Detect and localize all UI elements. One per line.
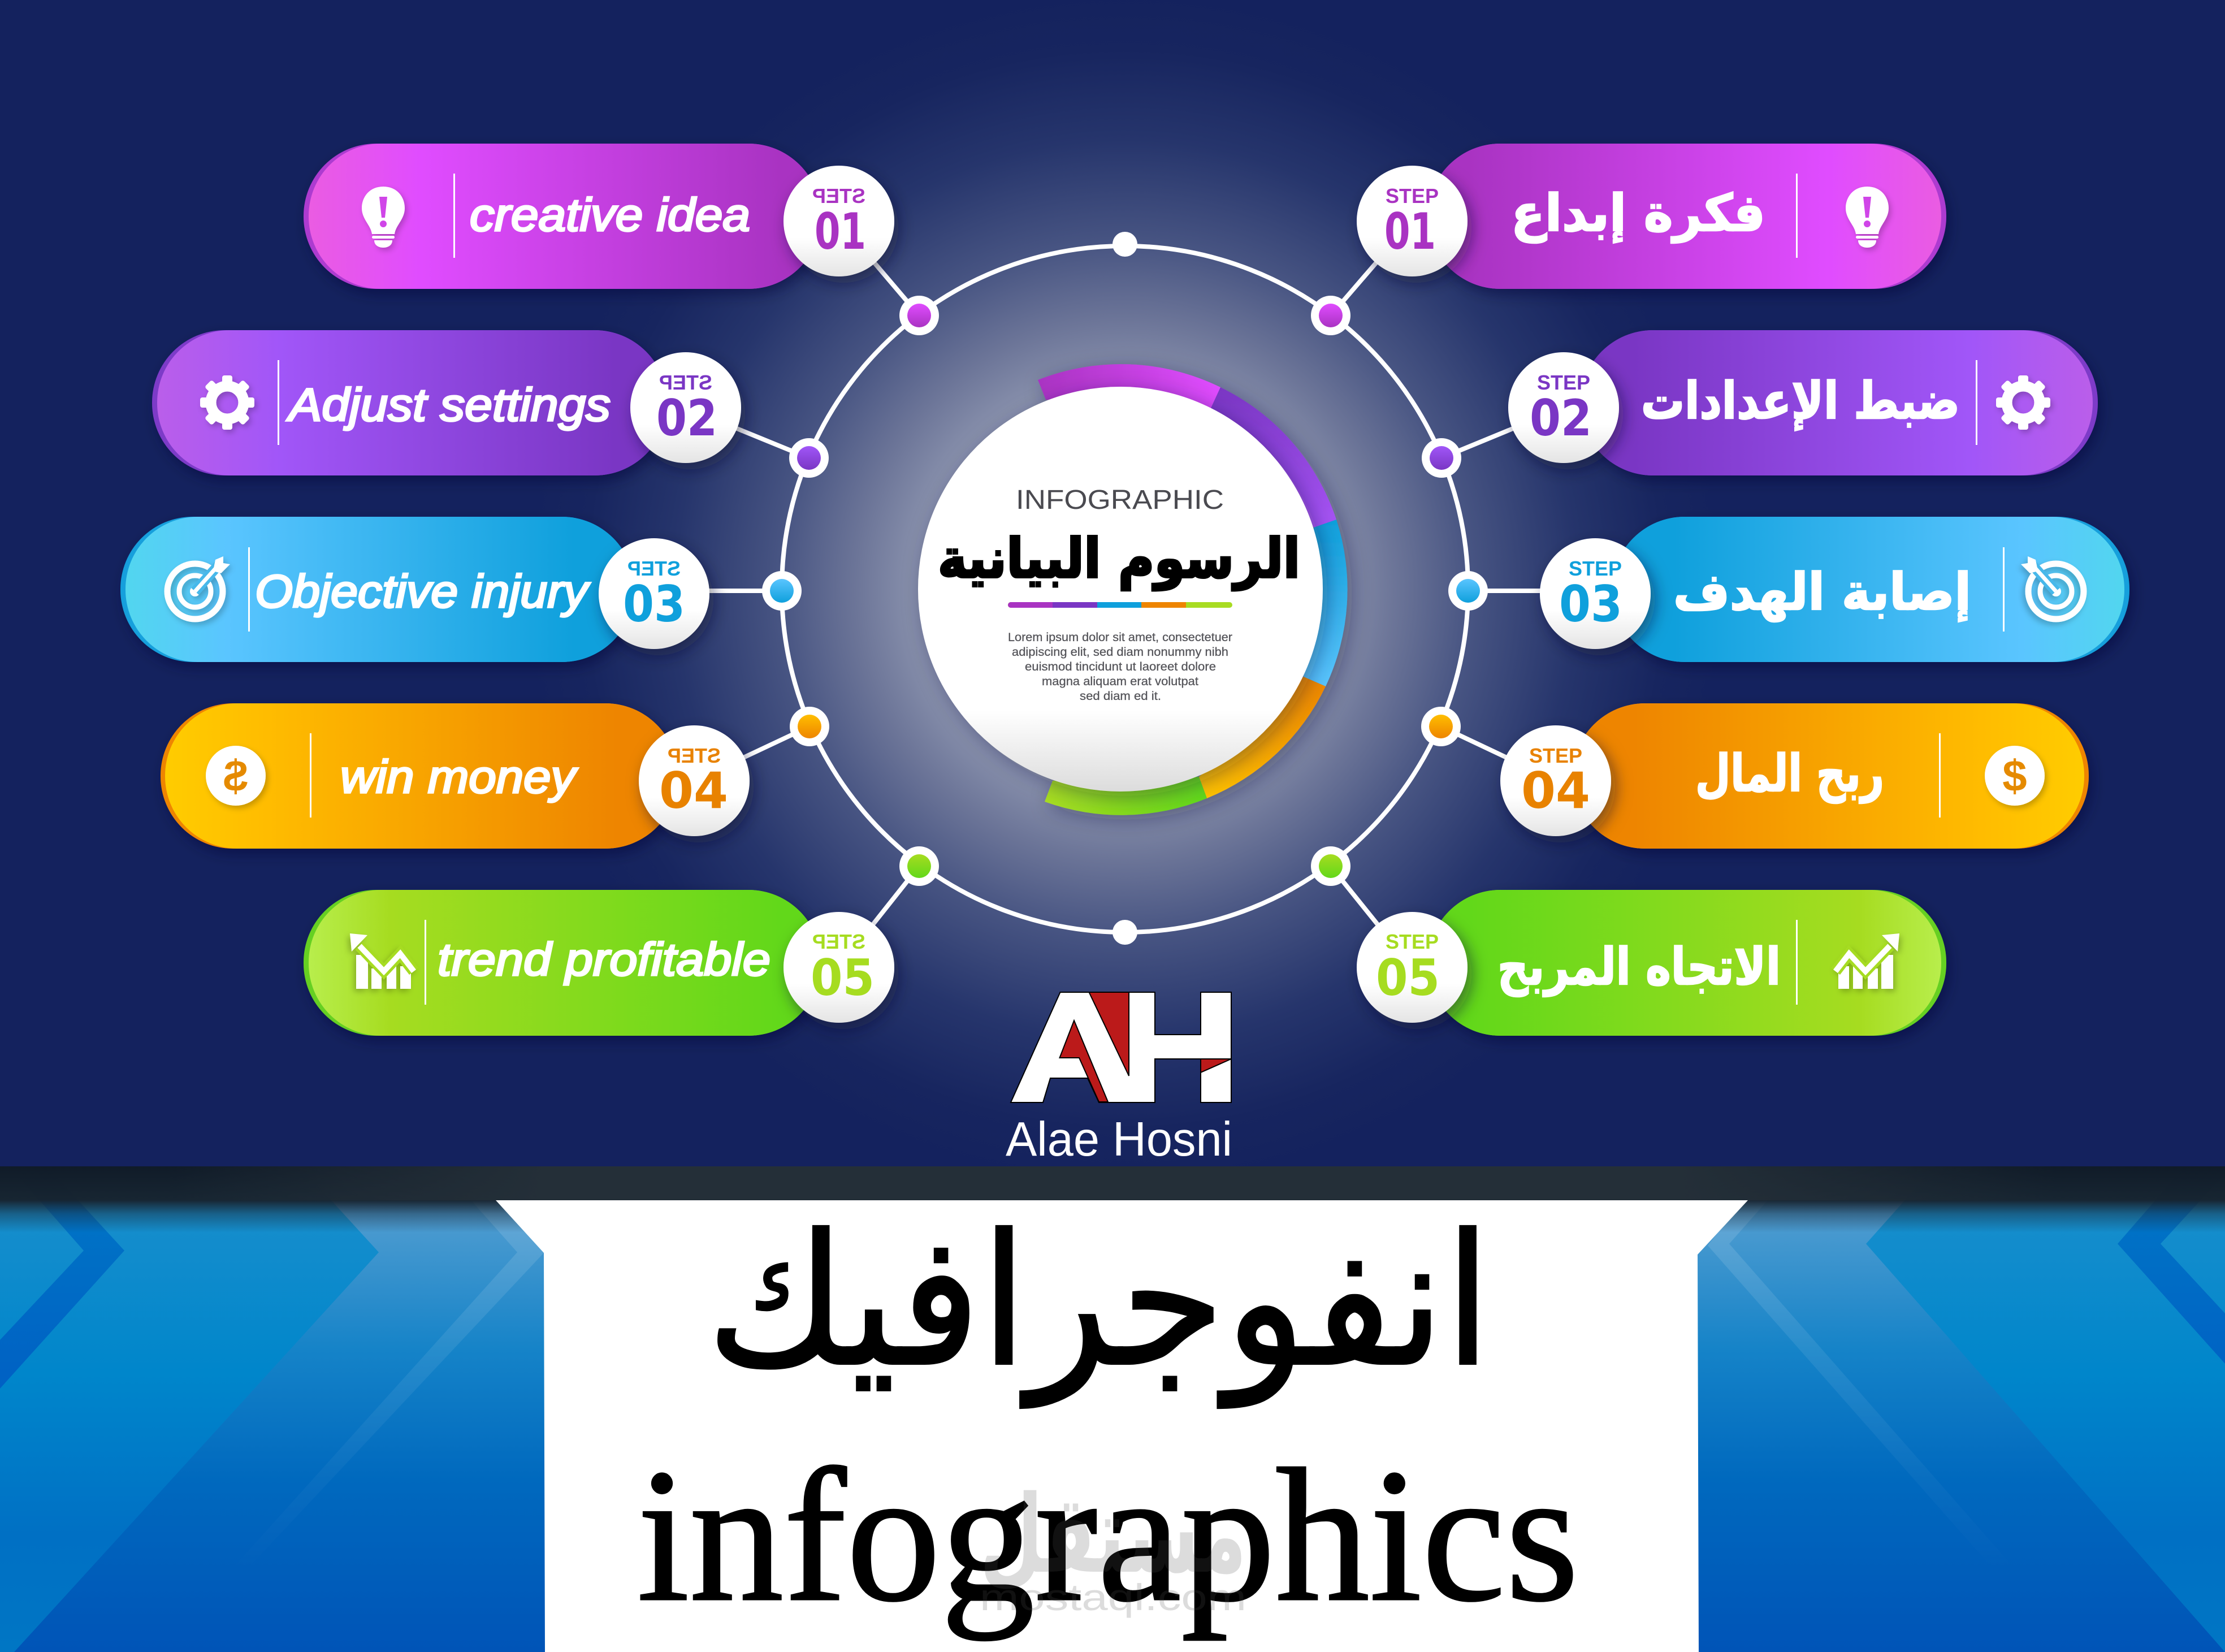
logo name: Alae Hosni (1006, 1113, 1232, 1166)
badge: right step 01: STEP (1386, 184, 1439, 207)
badge: right step 03: STEP (1569, 557, 1622, 580)
right pill 3: target (1612, 517, 2129, 662)
badge: right step 02: 02 (1530, 389, 1592, 447)
watermark: مستقل (980, 1472, 1246, 1597)
right pill 4: money (1573, 703, 2089, 849)
badge: right step 04 (1500, 725, 1611, 836)
icon: trend chart (350, 933, 414, 989)
badge: right step 05 (1357, 912, 1468, 1023)
center body text: adipiscing elit, sed diam nonummy nibh (1012, 646, 1228, 659)
badge: left step 01 (783, 166, 894, 276)
icon: target (167, 556, 230, 619)
center body text: magna aliquam erat volutpat (1042, 675, 1198, 688)
title: Arabic: انفوجرافيك (707, 1196, 1491, 1409)
badge: right step 03 (1540, 538, 1651, 649)
watermark: mostaql.com (980, 1576, 1246, 1618)
bottom blue panel: left side (0, 1166, 548, 1652)
left pill 5: trend profitable: trend profitable (438, 934, 770, 985)
badge: right step 04: STEP (1529, 744, 1582, 767)
icon: target (2021, 556, 2084, 619)
segmented colour ring (1038, 364, 1348, 815)
connector lines (654, 221, 1595, 967)
badge: left step 02: 02 (656, 389, 717, 447)
badge: left step 01: STEP (812, 184, 865, 207)
badge: right step 01 (1357, 166, 1468, 276)
badge: left step 01: 01 (815, 202, 866, 261)
icon: dollar coin (1985, 746, 2045, 806)
center body text: euismod tincidunt ut laoreet dolore (1025, 660, 1216, 673)
badge: left step 05 (783, 912, 894, 1023)
left pill 1: creative idea: creative idea (470, 189, 750, 241)
badge: right step 02: STEP (1537, 371, 1590, 394)
badge: right step 02 (1508, 352, 1619, 463)
badge: left step 02 (630, 352, 741, 463)
title: English: infographics (637, 1430, 1579, 1641)
right pill 1: idea: فكرة إبداع (1511, 184, 1765, 243)
icon: gear (1996, 375, 2050, 430)
left pill 2: Adjust settings: Adjust settings (286, 379, 611, 431)
badge: left step 03: STEP (627, 557, 681, 580)
badge: left step 05: STEP (812, 930, 865, 953)
left pill 1: creative idea (304, 144, 821, 289)
icon: trend chart (1836, 933, 1899, 989)
badge: left step 05: 05 (811, 949, 875, 1007)
left pill 2: Adjust settings (152, 330, 667, 475)
badge: left step 02: STEP (659, 371, 712, 394)
white title panel (496, 1200, 1748, 1652)
icon: gear (200, 375, 254, 430)
icon: dollar coin: $ (223, 751, 248, 801)
icon: dollar coin (206, 746, 266, 806)
badge: left step 04: STEP (668, 744, 721, 767)
right pill 4: money: ربح المال (1695, 744, 1884, 803)
right pill 2: settings: ضبط الإعدادات (1641, 371, 1960, 431)
dark band under the navy area (0, 1166, 2225, 1232)
badge: left step 04: 04 (659, 762, 728, 820)
left pill 4: win money: win money (340, 751, 578, 803)
left pill 4: win money (161, 703, 678, 849)
icon: light bulb (1846, 187, 1889, 248)
colour bar (1008, 602, 1232, 608)
badge: left step 03 (599, 538, 709, 649)
bottom blue panel: right side (1693, 1166, 2225, 1652)
AH logo (1011, 992, 1231, 1102)
central white disc (918, 387, 1323, 792)
right pill 5: trend: الاتجاه المربح (1497, 937, 1781, 997)
badge: right step 04: 04 (1521, 762, 1590, 820)
badge: right step 01: 01 (1384, 202, 1436, 261)
navy background with radial glow (0, 0, 2225, 1166)
left pill 5: trend profitable (304, 890, 821, 1036)
right pill 5: trend (1428, 890, 1946, 1036)
right pill 3: target: إصابة الهدف (1673, 563, 1971, 622)
large white orbit ring (782, 246, 1468, 932)
badge: right step 05: 05 (1376, 949, 1440, 1007)
badge: right step 05: STEP (1386, 930, 1439, 953)
center body text (1008, 631, 1232, 703)
center heading: INFOGRAPHIC (1016, 485, 1224, 515)
center body text: sed diam ed it. (1080, 690, 1161, 703)
badge: left step 04 (639, 725, 750, 836)
badge: right step 03: 03 (1559, 575, 1622, 633)
badge: left step 03: 03 (623, 575, 685, 633)
icon: dollar coin: $ (2002, 751, 2027, 801)
watermark (980, 1472, 1246, 1618)
center body text: Lorem ipsum dolor sit amet, consectetuer (1008, 631, 1232, 644)
icon: light bulb (362, 187, 405, 248)
right pill 1: idea (1428, 144, 1946, 289)
right pill 2: settings (1581, 330, 2098, 475)
orbit nodes (762, 232, 1488, 945)
left pill 3: Objective injury: Objective injury (255, 566, 591, 617)
center Arabic heading: الرسوم البيانية (938, 527, 1300, 591)
left pill 3: Objective injury (120, 517, 634, 662)
